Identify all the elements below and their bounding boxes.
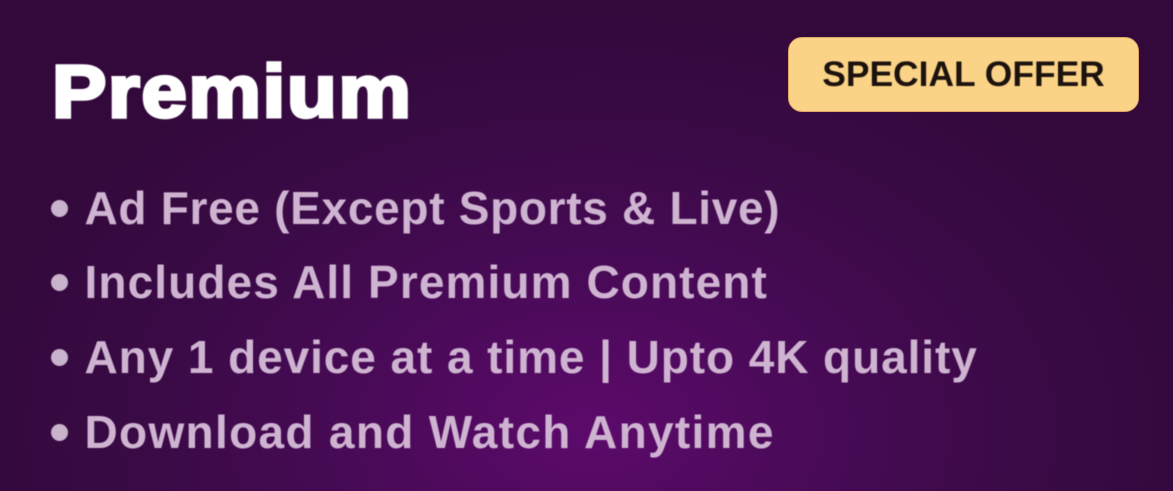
feature: download: Download and Watch Anytime (84, 406, 775, 458)
feature: ad free: Ad Free (Except Sports & Live) (84, 182, 780, 234)
feature: device and quality: Any 1 device at a time | Upto 4K quality (84, 331, 978, 383)
title: Premium (52, 50, 413, 133)
badge: special offer (788, 37, 1139, 112)
badge: special offer: SPECIAL OFFER (822, 54, 1105, 94)
feature: premium content: Includes All Premium Content (84, 256, 768, 308)
